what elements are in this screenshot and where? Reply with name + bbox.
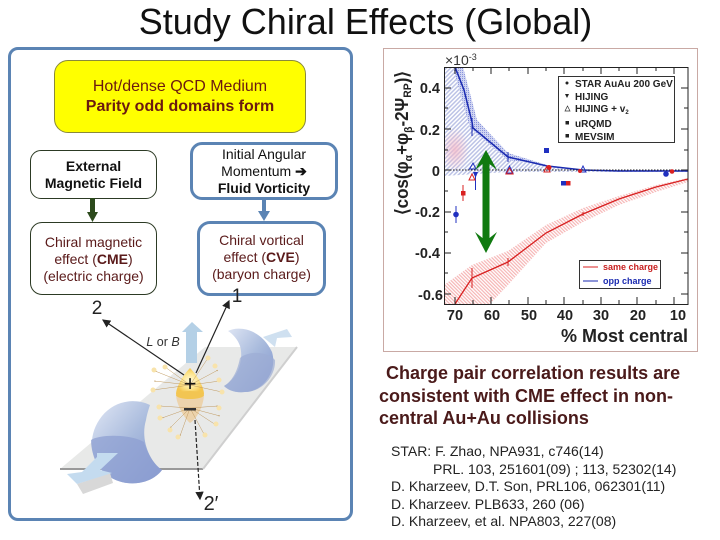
- box: initial angular momentum: Fluid Vorticity: [218, 180, 310, 196]
- arrow: green double-headed: [475, 150, 497, 253]
- text: conclusion: Charge pair correlation results are: [386, 363, 680, 383]
- y axis title: )⟩: [392, 71, 412, 83]
- legend: series: 2: [625, 110, 629, 116]
- box: external magnetic field: External: [66, 158, 121, 174]
- y axis title: -2Ψ: [392, 98, 412, 127]
- text: references: D. Kharzeev, et al. NPA803, 227(08): [391, 513, 616, 529]
- axis tick labels: 70: [447, 308, 463, 324]
- axis tick labels: 40: [557, 308, 573, 324]
- x axis title: % Most central: [561, 326, 688, 346]
- particle arrows: [103, 301, 229, 499]
- text: references: STAR: F. Zhao, NPA931, c746(14): [391, 443, 604, 459]
- axis tick labels: 10: [670, 308, 686, 324]
- y axis title: α: [403, 155, 415, 161]
- text: references: [391, 443, 676, 529]
- text: conclusion: [379, 363, 680, 428]
- exponent label: ×10: [445, 52, 469, 68]
- text: references: D. Kharzeev. PLB633, 260 (06): [391, 496, 585, 512]
- text: references: D. Kharzeev, D.T. Son, PRL106, 062301(11): [391, 478, 665, 494]
- data points: [453, 148, 674, 223]
- icon: left nucleus: [67, 401, 162, 494]
- axis tick labels: 60: [484, 308, 500, 324]
- diagram labels: 2′: [204, 493, 219, 515]
- collision plane: [60, 347, 297, 469]
- axis tick labels: -0.4: [415, 246, 440, 262]
- legend: series: HIJING + v: [575, 104, 625, 115]
- y axis title: β: [403, 126, 415, 133]
- legend: series: HIJING: [575, 92, 609, 103]
- icon: right nucleus: [224, 329, 292, 392]
- diagram labels: L or B: [146, 335, 180, 349]
- legend: series: [558, 76, 674, 143]
- box: hot dense QCD medium: Parity odd domains form: [86, 98, 274, 115]
- legend: charge: [580, 260, 660, 288]
- chart frame: [384, 48, 698, 352]
- axis tick labels: 50: [521, 308, 537, 324]
- legend: series: STAR AuAu 200 GeV: [575, 79, 673, 90]
- box: initial angular momentum: Initial Angular: [222, 146, 306, 162]
- axis tick labels: 0.2: [420, 123, 440, 139]
- diagram labels: 2: [92, 298, 102, 319]
- exponent label: -3: [469, 52, 477, 62]
- zero line: [451, 170, 680, 171]
- box: chiral vortical effect: [197, 221, 326, 296]
- arrow: vorticity to CVE: [258, 200, 270, 221]
- curves: [455, 67, 688, 304]
- y axis title: +φ: [392, 133, 412, 155]
- axes: [444, 67, 688, 304]
- axis tick labels: 0.4: [420, 81, 440, 97]
- text: references: PRL. 103, 251601(09) ; 113, 52302(14): [433, 460, 676, 476]
- box: initial angular momentum: Momentum ➔: [221, 163, 307, 179]
- box: chiral vortical effect: (baryon charge): [212, 266, 311, 282]
- legend: series: MEVSIM: [575, 132, 614, 143]
- box: chiral magnetic effect: Chiral magnetic: [45, 234, 142, 250]
- charges: [184, 371, 196, 410]
- box: chiral magnetic effect: effect (CME): [54, 251, 133, 267]
- title: Study Chiral Effects (Global): [139, 1, 592, 42]
- arrow: magnetic field to CME: [87, 198, 98, 222]
- legend: charge: opp charge: [603, 276, 652, 286]
- error bands: [441, 67, 688, 304]
- axis tick labels: -0.6: [418, 288, 443, 304]
- box: initial angular momentum: [190, 142, 338, 200]
- box: chiral magnetic effect: (electric charge): [43, 268, 144, 284]
- legend: series: uRQMD: [575, 119, 612, 130]
- illustration: colliding nuclei: [60, 286, 298, 515]
- axis tick labels: 30: [593, 308, 609, 324]
- box: external magnetic field: [30, 150, 157, 199]
- box: external magnetic field: Magnetic Field: [45, 175, 142, 191]
- axis tick labels: -0.2: [415, 205, 440, 221]
- text: conclusion: consistent with CME effect in non-: [379, 386, 673, 406]
- axis tick labels: 20: [630, 308, 646, 324]
- quadrupole glow: [150, 356, 224, 440]
- arrow: up L or B: [182, 322, 203, 363]
- y axis title: RP: [402, 83, 414, 98]
- axis tick labels: 0: [432, 164, 440, 180]
- chart: charge pair correlation: [383, 48, 698, 352]
- text: conclusion: central Au+Au collisions: [379, 408, 589, 428]
- box: chiral magnetic effect: [30, 222, 157, 295]
- y axis title: ⟨cos(φ: [392, 158, 412, 215]
- box: chiral vortical effect: Chiral vortical: [219, 232, 304, 248]
- diagram labels: [92, 286, 242, 515]
- box: hot dense QCD medium: Hot/dense QCD Medium: [93, 78, 267, 95]
- error ticks: [472, 118, 583, 288]
- panel: flow diagram frame: [8, 47, 353, 521]
- legend: charge: same charge: [603, 262, 658, 272]
- box: hot dense QCD medium: [54, 60, 306, 133]
- axis tick labels: [415, 81, 686, 324]
- diagram labels: 1: [232, 286, 242, 307]
- box: chiral vortical effect: effect (CVE): [223, 249, 300, 265]
- charges: +: [184, 371, 196, 396]
